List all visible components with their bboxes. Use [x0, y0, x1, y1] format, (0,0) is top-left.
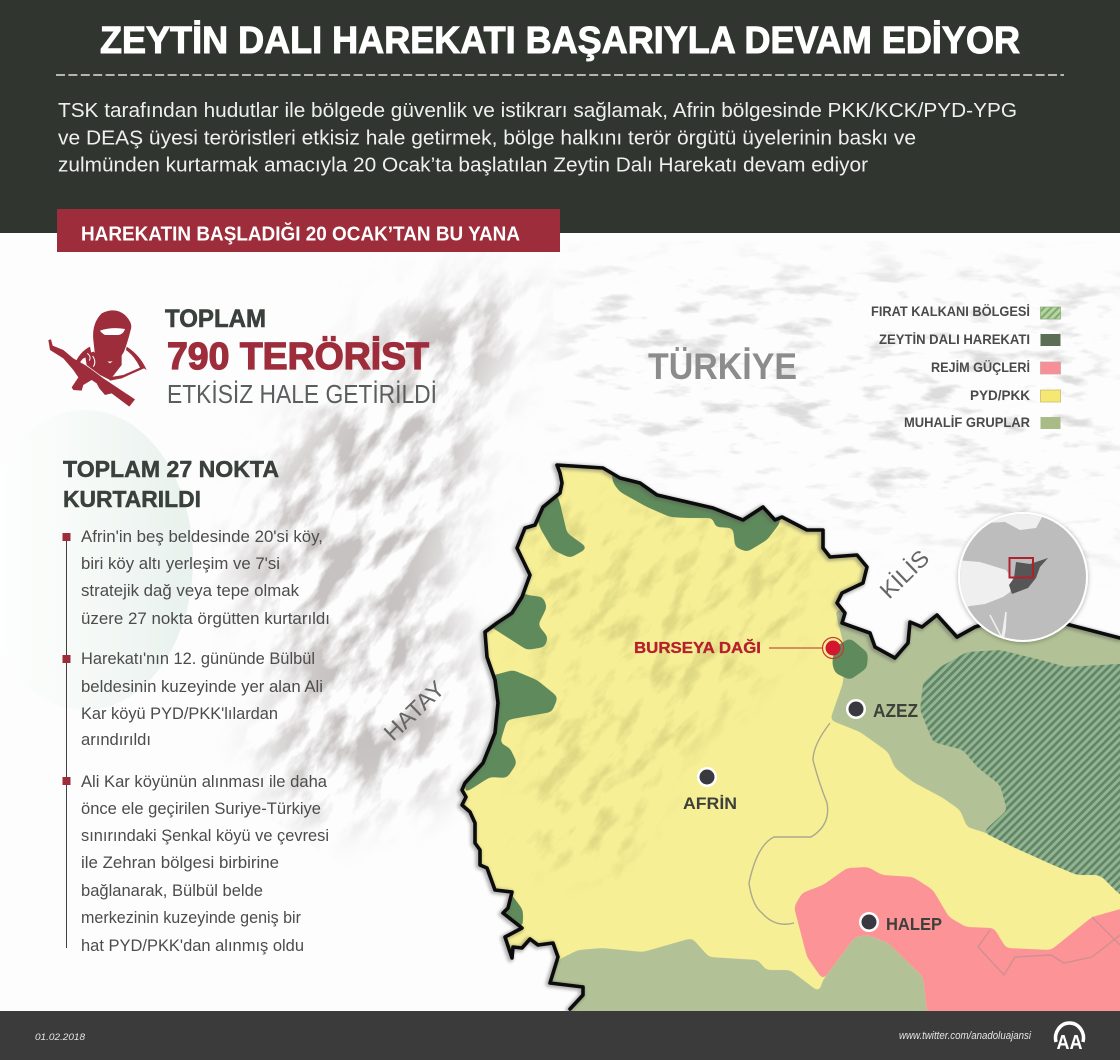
intro text: zulmünden kurtarmak amacıyla 20 Ocak’ta başlatılan Zeytin Dalı Harekatı devam ediyor [58, 154, 868, 176]
icon: agency logo [1056, 1023, 1084, 1054]
region: PYD/PKK yellow [450, 450, 1120, 1011]
subheading [63, 456, 279, 512]
legend item: Zeytin Dalı: ZEYTİN DALI HAREKATI [879, 331, 1030, 347]
intro text [58, 100, 1017, 176]
inset locator map [955, 510, 1095, 650]
bullet 3: Ali Kar köyünün alınması ile daha [81, 773, 328, 791]
bullet 2: Kar köyü PYD/PKK'lılardan [81, 705, 278, 723]
intro text: ve DEAŞ üyesi teröristleri etkisiz hale getirmek, bölge halkını terör örgütü üyelerinin baskı ve [58, 128, 916, 150]
district lines [749, 723, 1120, 975]
date: 01.02.2018 [35, 1032, 86, 1043]
bullet 3: merkezinin kuzeyinde geniş bir [81, 909, 301, 927]
marker: Azez: AZEZ [873, 701, 918, 721]
bullet 3: bağlanarak, Bülbül belde [81, 882, 263, 900]
Zeytin Dalı patches [462, 468, 868, 927]
legend item: Muhalif: MUHALİF GRUPLAR [904, 414, 1030, 430]
region: Fırat Kalkanı hatched [920, 650, 1120, 894]
marker: Halep: HALEP [886, 914, 942, 934]
legend [871, 303, 1060, 430]
subheading: TOPLAM 27 NOKTA [63, 456, 279, 482]
bullet 2: beldesinin kuzeyinde yer alan Ali [81, 678, 323, 696]
icon: agency logo: AA [1056, 1032, 1082, 1054]
map regions [464, 467, 1120, 1011]
bullet 1: biri köy altı yerleşim ve 7'si [81, 555, 280, 573]
region: regime forces [794, 867, 1120, 1011]
province label: Kilis: KİLİS [874, 545, 934, 604]
header panel [0, 0, 1120, 233]
bullet 3: sınırındaki Şenkal köyü ve çevresi [81, 827, 329, 845]
marker: Afrin [683, 767, 737, 813]
bullet 3: ile Zehran bölgesi birbirine [81, 854, 279, 872]
marker: Azez [846, 699, 918, 721]
bullet 1: stratejik dağ veya tepe olmak [81, 582, 300, 600]
bullet 3: hat PYD/PKK'dan alınmış oldu [81, 937, 304, 955]
legend item: Rejim: REJİM GÜÇLERİ [931, 359, 1030, 375]
marker: Halep [859, 912, 942, 934]
bullet 2: arındırıldı [81, 731, 151, 749]
bullet 1 [62, 528, 330, 628]
region: opposition groups north [830, 600, 1120, 890]
red banner: HAREKATIN BAŞLADIĞI 20 OCAK’TAN BU YANA [81, 222, 520, 246]
label: toplam: TOPLAM [165, 305, 266, 333]
title: ZEYTİN DALI HAREKATI BAŞARIYLA DEVAM EDİYOR [100, 20, 1020, 62]
bullet 3: önce ele geçirilen Suriye-Türkiye [81, 800, 321, 818]
bullet 1: üzere 27 nokta örgütten kurtarıldı [81, 610, 330, 628]
marker: Afrin: AFRİN [683, 794, 737, 813]
number: 790 terörist: 790 TERÖRİST [167, 335, 429, 378]
legend item: PYD/PKK [970, 387, 1060, 403]
twitter url: www.twitter.com/anadoluajansi [899, 1030, 1031, 1042]
bullet 3 [62, 773, 329, 955]
province label: Hatay: HATAY [378, 675, 450, 746]
footer [0, 1011, 1120, 1060]
total count block [165, 305, 437, 409]
border line [460, 465, 1120, 1010]
panel: liberated points [62, 456, 330, 955]
yellow terrain shading [524, 504, 812, 873]
label: neutralised: ETKİSİZ HALE GETİRİLDİ [167, 380, 437, 409]
bullet 2: Harekatı'nın 12. gününde Bülbül [81, 650, 315, 668]
icon: armed terrorist [48, 310, 147, 407]
bullet 2 [62, 650, 323, 749]
region: opposition groups south [552, 936, 927, 1011]
marker: Burseya Dağı: BURSEYA DAĞI [634, 639, 761, 657]
bullet 1: Afrin'in beş beldesinde 20'si köy, [81, 528, 323, 546]
legend item: PYD/PKK: PYD/PKK [970, 387, 1030, 403]
red banner [57, 209, 560, 252]
map background: terrain [72, 248, 1120, 841]
marker: Burseya Dağı [634, 638, 844, 658]
legend item: Fırat Kalkanı: FIRAT KALKANI BÖLGESİ [871, 303, 1030, 319]
subheading: KURTARILDI [63, 486, 201, 512]
country label: Türkiye: TÜRKİYE [648, 346, 797, 387]
intro text: TSK tarafından hudutlar ile bölgede güvenlik ve istikrarı sağlamak, Afrin bölgesinde PKK/KCK/PYD-YPG [58, 100, 1017, 122]
